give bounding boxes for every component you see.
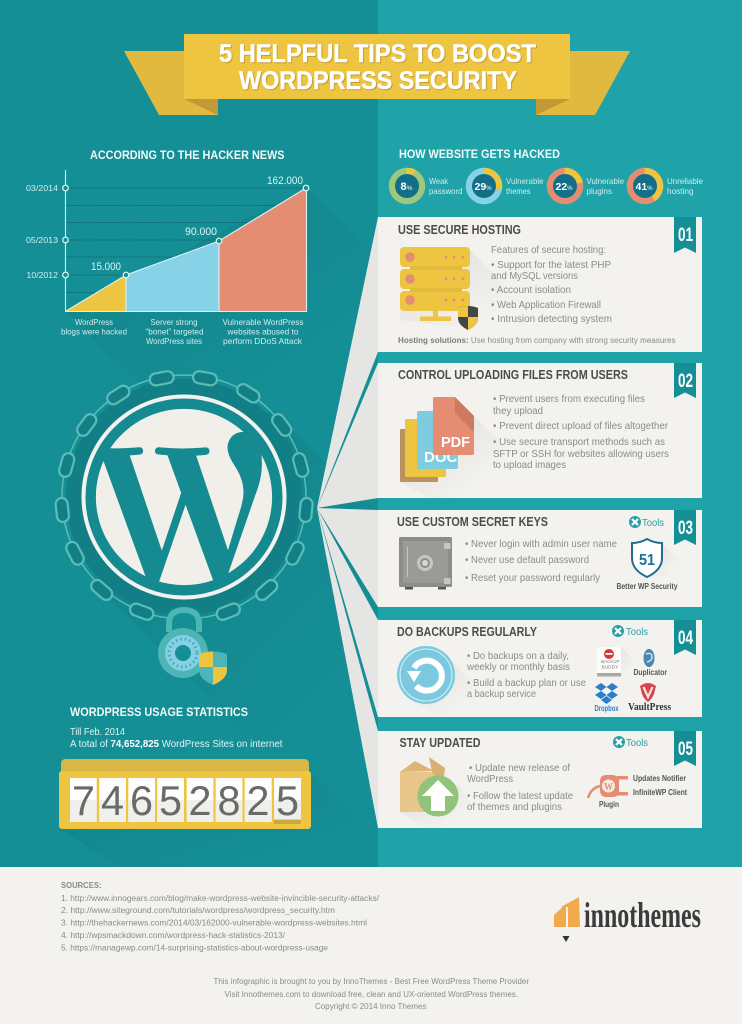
usage text	[70, 726, 283, 750]
sources list: 2. http://www.siteground.com/tutorials/wordpress/wordpress_security.htm	[61, 906, 335, 915]
category labels: WordPress	[75, 317, 113, 327]
text block 04: weekly or monthly basis	[466, 661, 570, 673]
background right	[378, 0, 742, 867]
sources list: 1. http://www.innogears.com/blog/make-wordpress-website-invincible-security-attacks/	[61, 894, 380, 903]
hacked heading: HOW WEBSITE GETS HACKED	[399, 149, 560, 161]
value labels: 162.000	[267, 175, 303, 187]
icon: server	[400, 247, 520, 332]
icon: document files: PDF	[441, 435, 470, 451]
tools label 05: Tools	[626, 737, 648, 749]
text block 05: of themes and plugins	[467, 801, 562, 813]
area: salmon	[219, 188, 306, 311]
tools label 04	[612, 625, 648, 638]
counter digits: 5	[276, 777, 299, 824]
panel: tip 01 secure hosting	[378, 217, 702, 352]
sources list: 4. http://wpsmackdown.com/wordpress-hack-statistics-2013/	[61, 931, 286, 940]
ribbon 04: 04	[678, 628, 693, 649]
text block 04: • Do backups on a daily,	[467, 650, 569, 662]
text block 01: • Intrusion detecting system	[491, 313, 612, 325]
panel: how website gets hacked	[392, 149, 703, 201]
text block 02: to upload images	[493, 459, 566, 471]
donut: unreliable hosting 41%: 41%	[636, 181, 653, 193]
counter digits: 5	[159, 777, 182, 824]
counter digits: 2	[246, 777, 270, 824]
ribbon 02	[674, 363, 696, 398]
donut: vulnerable themes 29%: themes	[506, 186, 530, 196]
donut: weak password 8%: Weak	[429, 176, 449, 186]
text block 02: • Use secure transport methods such as	[493, 436, 665, 448]
text block 05	[467, 762, 573, 813]
sources list: 3. http://thehackernews.com/2014/03/162000-vulnerable-wordpress-websites.html	[61, 918, 367, 928]
donut: weak password 8%: password	[429, 186, 463, 196]
sources list	[61, 881, 380, 952]
text block 03: • Never use default password	[465, 554, 589, 566]
counter	[59, 759, 311, 829]
text block 01	[491, 244, 612, 325]
ribbon 04	[674, 620, 696, 655]
heading 03: USE CUSTOM SECRET KEYS	[397, 515, 548, 529]
category labels: perform DDoS Attack	[223, 336, 303, 346]
value labels	[91, 175, 303, 273]
long shadows on the left column	[60, 312, 276, 830]
date labels: 03/2014	[26, 183, 58, 193]
text block 05: • Follow the latest update	[467, 790, 573, 802]
text block 03	[465, 538, 617, 584]
text block 04: • Build a backup plan or use	[467, 677, 586, 689]
heading 05: STAY UPDATED	[400, 736, 480, 750]
footer credits: Copyright © 2014 Inno Themes	[315, 1002, 426, 1011]
text block 01: Features of secure hosting:	[491, 244, 606, 256]
text block 03: • Never login with admin user name	[465, 538, 617, 550]
footer background	[0, 867, 742, 1024]
icon: chained WordPress logo	[55, 370, 313, 622]
icon: padlock with shield	[158, 610, 227, 685]
counter digits: 7	[72, 777, 95, 824]
icon: Better WP Security shield: 51	[639, 552, 655, 569]
usage heading: WORDPRESS USAGE STATISTICS	[70, 707, 248, 719]
usage text: A total of 74,652,825 WordPress Sites on internet	[70, 738, 283, 750]
ribbon 03	[674, 510, 696, 545]
icon: BackupBuddy	[597, 647, 636, 676]
donut: vulnerable themes 29%	[469, 171, 544, 201]
icon: Duplicator	[634, 649, 667, 677]
icon: Better WP Security shield: Better WP Security	[616, 582, 678, 591]
rays from logo to the tip cards	[317, 217, 378, 828]
date labels: 05/2013	[26, 235, 58, 245]
donut: weak password 8%: 8%	[400, 181, 413, 193]
area: blue	[126, 241, 219, 311]
donut: vulnerable plugins 22%: 22%	[556, 181, 573, 193]
tools label 03: Tools	[642, 517, 664, 529]
heading 02: CONTROL UPLOADING FILES FROM USERS	[398, 368, 628, 382]
background left	[0, 0, 378, 867]
counter digits: 8	[218, 777, 240, 824]
text block 04	[466, 650, 586, 700]
donut: weak password 8%	[392, 171, 463, 201]
chart heading: ACCORDING TO THE HACKER NEWS	[90, 150, 285, 162]
text block 05: • Update new release of	[469, 762, 570, 774]
text block 01: • Account isolation	[491, 284, 571, 296]
date labels	[26, 183, 58, 280]
area: yellow	[66, 275, 126, 311]
donut: vulnerable plugins 22%: plugins	[586, 186, 612, 196]
title text: WORDPRESS SECURITY	[240, 68, 518, 96]
donut: vulnerable plugins 22%	[550, 171, 624, 201]
text block 01: and MySQL versions	[491, 270, 578, 282]
icon: BackupBuddy: BACKUP	[601, 659, 620, 664]
ribbon 01: 01	[678, 225, 693, 246]
counter digits: 2	[188, 777, 212, 824]
plugin labels: Updates Notifier	[633, 774, 686, 783]
usage text: Till Feb. 2014	[70, 726, 125, 738]
donut: vulnerable plugins 22%: Vulnerable	[586, 176, 624, 186]
text block 01: • Support for the latest PHP	[491, 259, 611, 271]
tools label 03	[629, 516, 664, 529]
heading 01: USE SECURE HOSTING	[398, 223, 521, 237]
title text: 5 HELPFUL TIPS TO BOOST	[219, 40, 536, 68]
ribbon 05	[674, 731, 696, 766]
panel: usage statistics	[59, 707, 311, 829]
text block 02	[493, 393, 669, 471]
icon: Dropbox	[594, 683, 619, 713]
ribbon 02: 02	[678, 371, 693, 392]
footer credits	[214, 977, 529, 1011]
icon: Duplicator: Duplicator	[634, 668, 667, 677]
logo: innothemes	[554, 895, 701, 942]
category labels: WordPress sites	[146, 336, 202, 346]
ribbon 05: 05	[678, 739, 693, 760]
sources list: 5. https://managewp.com/14-surprising-statistics-about-wordpress-usage	[61, 944, 329, 952]
icon: Dropbox: Dropbox	[594, 704, 619, 713]
plugin labels: InfiniteWP Client	[633, 788, 687, 797]
donut: unreliable hosting 41%: Unreliable	[667, 176, 703, 186]
sources list: SOURCES:	[61, 881, 102, 890]
icon: VaultPress: VaultPress	[628, 701, 672, 713]
date labels: 10/2012	[26, 270, 58, 280]
title text	[219, 40, 537, 96]
text block 04: a backup service	[467, 688, 536, 700]
category labels	[61, 317, 304, 346]
category labels: Vulnerable WordPress	[222, 317, 304, 327]
icon: backup clock	[397, 646, 480, 717]
category labels: websites abused to	[227, 326, 299, 336]
category labels: Server strong	[150, 317, 198, 327]
text block 02: • Prevent direct upload of files altogether	[493, 420, 668, 432]
value labels: 90.000	[185, 226, 217, 238]
text block 02: they upload	[493, 405, 543, 417]
tools label 05	[613, 736, 648, 749]
title text: WORDPRESS SECURITY	[239, 67, 517, 95]
counter digits: 4	[101, 777, 124, 824]
text block 02: • Prevent users from executing files	[493, 393, 645, 405]
donut: vulnerable themes 29%: Vulnerable	[506, 176, 544, 186]
icon: plugin: W	[604, 782, 613, 793]
footer credits: Visit Innothemes.com to download free, clean and UX-oriented WordPress themes.	[224, 990, 518, 999]
icon: plugin	[588, 775, 628, 798]
panel: tip 02 uploading	[378, 363, 702, 498]
icon: VaultPress	[628, 683, 672, 713]
text block 03: • Reset your password regularly	[465, 572, 601, 584]
panel: tip 05 stay updated	[378, 731, 702, 828]
tools label 04: Tools	[626, 626, 648, 638]
icon: box with upload arrow	[400, 757, 472, 828]
panel: tip 04 backups	[378, 620, 702, 717]
icon: BackupBuddy: BUDDY	[602, 664, 619, 670]
footer credits: This infographic is brought to you by InnoThemes - Best Free WordPress Theme Provider	[214, 977, 529, 986]
text block 05: WordPress	[467, 773, 513, 785]
ribbon 03: 03	[678, 518, 693, 539]
icon: document files	[400, 397, 510, 498]
donut: unreliable hosting 41%	[630, 171, 703, 201]
counter digits: 6	[130, 777, 153, 824]
hosting solutions note: Hosting solutions: Use hosting from company with strong security measures	[398, 335, 676, 345]
text block 02: SFTP or SSH for websites allowing users	[493, 448, 669, 460]
text block 01: • Web Application Firewall	[491, 299, 601, 311]
title banner	[124, 34, 630, 115]
value labels: 15.000	[91, 261, 121, 273]
plugin labels	[599, 774, 687, 809]
counter digits	[72, 777, 299, 824]
icon: safe	[399, 537, 452, 590]
donut: vulnerable themes 29%: 29%	[474, 181, 492, 193]
title text: 5 HELPFUL TIPS TO BOOST	[220, 41, 537, 69]
heading 04: DO BACKUPS REGULARLY	[397, 625, 538, 639]
category labels: “bonet” targeted	[146, 326, 204, 336]
ribbon 01	[674, 217, 696, 253]
plugin labels: Plugin	[599, 800, 619, 809]
category labels: blogs were hacked	[61, 326, 127, 336]
icon: Better WP Security shield	[616, 539, 678, 591]
icon: document files: DOC	[424, 449, 458, 466]
panel: tip 03 secret keys	[378, 510, 702, 607]
panel: hacker news chart	[26, 150, 309, 346]
donut: unreliable hosting 41%: hosting	[667, 186, 694, 196]
